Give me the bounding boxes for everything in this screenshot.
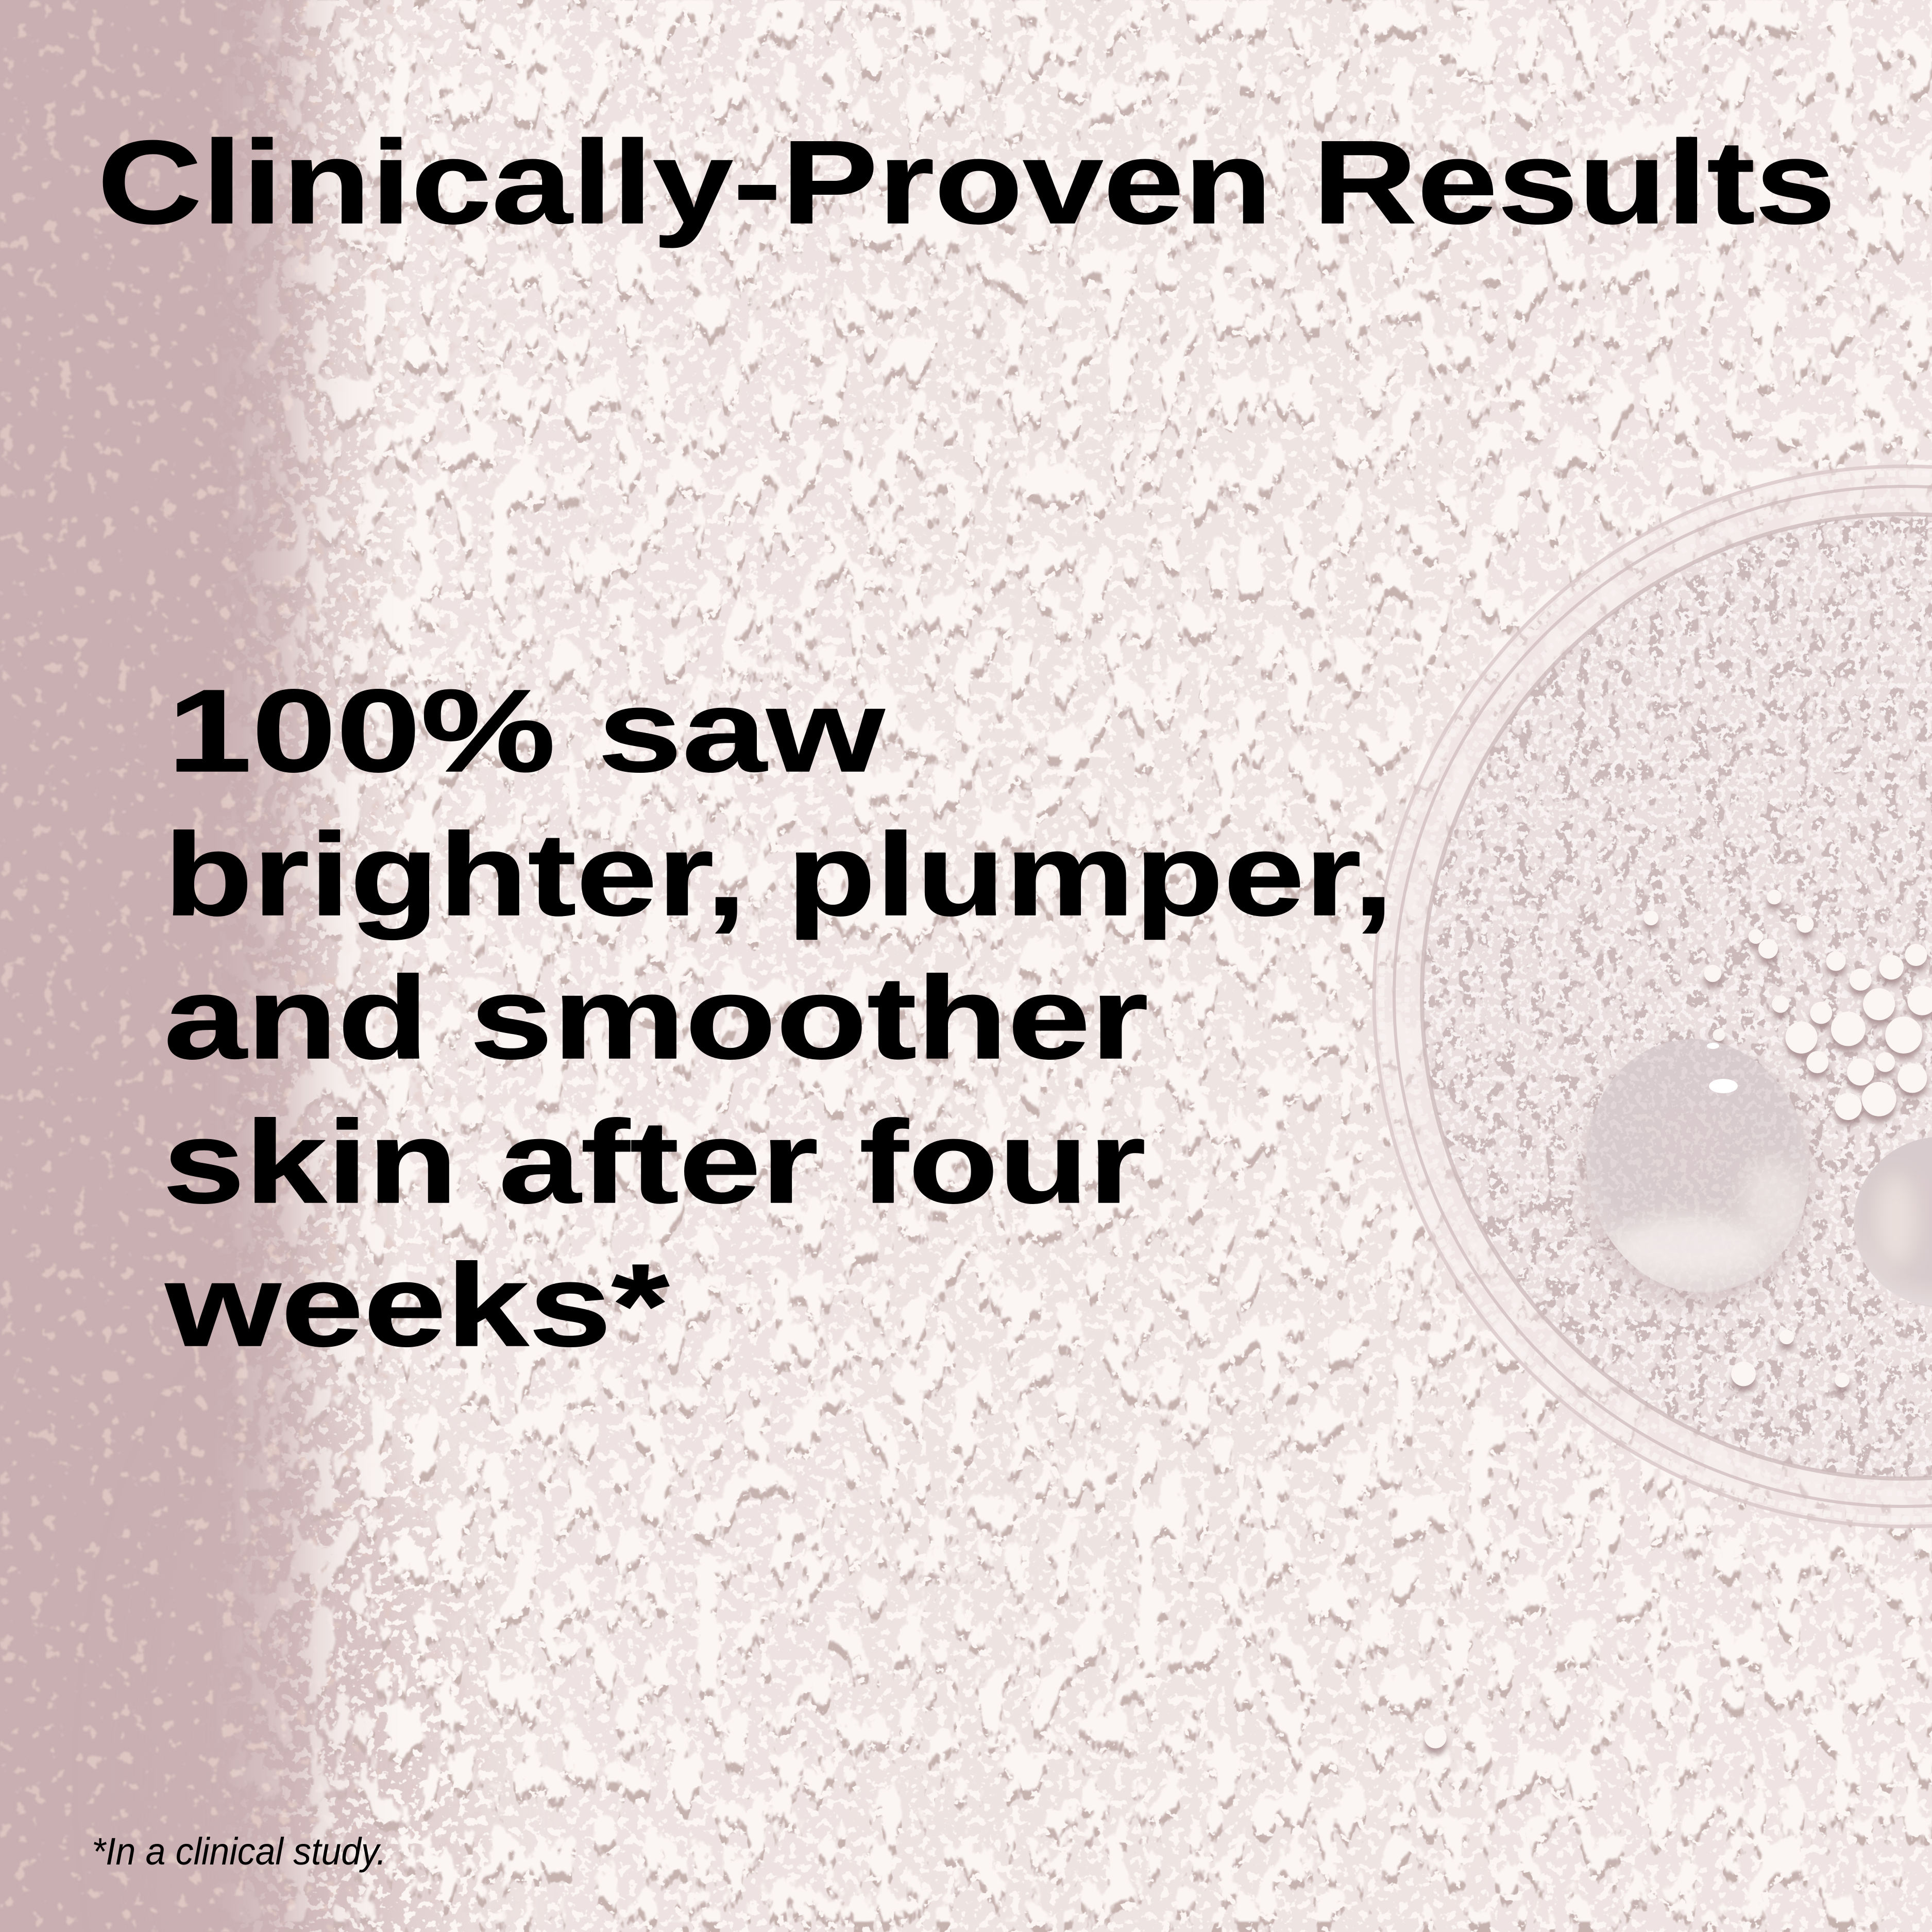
- line: brighter, plumper,: brighter, plumper,: [164, 809, 1394, 940]
- line: 100% saw: 100% saw: [167, 666, 885, 796]
- icon: petri dish with powder: [1374, 466, 1932, 1749]
- line: weeks*: weeks*: [165, 1240, 669, 1371]
- line: skin after four: skin after four: [163, 1097, 1146, 1228]
- line: and smoother: and smoother: [164, 953, 1148, 1083]
- title: Clinically-Proven Results: [97, 116, 1836, 248]
- main statement: [163, 666, 1394, 1371]
- water droplet large: [1575, 1039, 1820, 1313]
- powder clumps: [1425, 890, 1932, 1749]
- water droplet right: [1854, 1137, 1932, 1308]
- footnote: *In a clinical study.: [92, 1830, 386, 1873]
